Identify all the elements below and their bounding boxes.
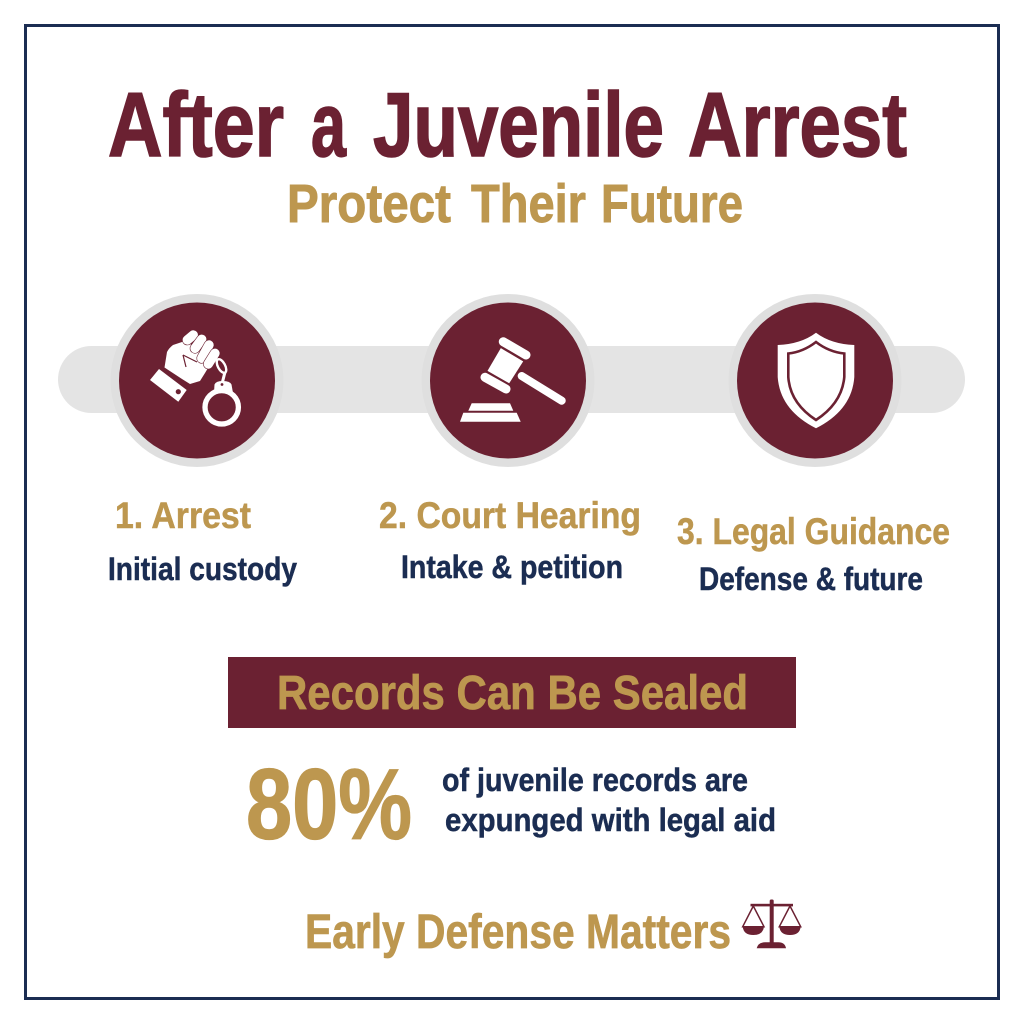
statistic description: expunged with legal aid [445,802,776,838]
step 3 heading: 3. Legal Guidance [677,511,950,552]
step 1 description: Initial custody [108,551,297,587]
statistic description: of juvenile records are [442,762,748,798]
title [108,75,907,176]
subtitle: Their [471,174,586,234]
step 3 description: Defense & future [699,561,923,597]
subtitle: Protect [287,174,451,234]
step 1 icon: fist with handcuff [110,294,284,467]
icon: scales of justice [743,900,801,948]
step 2 icon: gavel [422,294,594,467]
title: a [311,75,347,176]
statistic description [442,762,776,838]
step 3 icon: shield [728,294,902,467]
banner [228,657,796,728]
step 2 description: Intake & petition [401,549,623,585]
statistic: 80%: 80% [246,748,412,860]
title: Arrest [688,75,907,176]
closing message: Early Defense Matters [305,906,731,959]
title: After [108,75,284,176]
step 1 heading: 1. Arrest [115,495,251,536]
subtitle [287,174,743,234]
banner: Records Can Be Sealed [277,667,748,720]
timeline bar [58,346,965,413]
title: Juvenile [373,75,664,176]
subtitle: Future [601,174,743,234]
step 2 heading: 2. Court Hearing [379,495,641,536]
